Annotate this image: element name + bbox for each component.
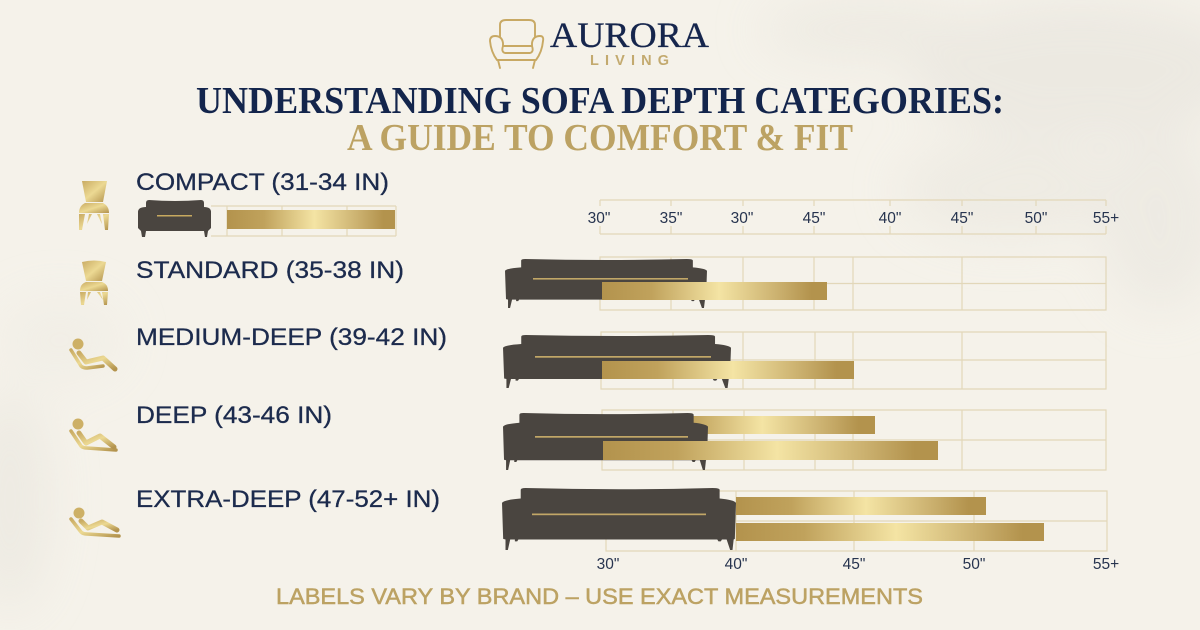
bottom axis: 45" bbox=[843, 556, 865, 573]
top axis: 55+ bbox=[1093, 210, 1119, 227]
top axis: 35" bbox=[660, 210, 682, 227]
label: MEDIUM-DEEP (39-42 IN) bbox=[136, 324, 447, 351]
bottom axis: 55+ bbox=[1093, 556, 1119, 573]
icon: armchair bbox=[490, 20, 543, 68]
row: standard bbox=[80, 257, 1106, 310]
icon: recliner bbox=[71, 508, 119, 536]
icon: sofa bbox=[503, 335, 731, 388]
top axis bbox=[588, 200, 1119, 234]
top axis: 45" bbox=[951, 210, 973, 227]
wordmark: AURORA bbox=[550, 15, 709, 55]
icon: sofa bbox=[502, 488, 736, 550]
footer note: LABELS VARY BY BRAND – USE EXACT MEASUREMENTS bbox=[276, 584, 923, 609]
label: EXTRA-DEEP (47-52+ IN) bbox=[136, 486, 440, 513]
icon: recliner bbox=[71, 418, 116, 450]
bottom axis: 30" bbox=[597, 556, 619, 573]
depth grid bbox=[601, 332, 1106, 389]
row: compact bbox=[79, 169, 396, 237]
title: UNDERSTANDING SOFA DEPTH CATEGORIES: bbox=[196, 80, 1004, 122]
lower bar bbox=[736, 523, 1044, 541]
upper bar bbox=[640, 416, 875, 434]
subtitle: A GUIDE TO COMFORT & FIT bbox=[347, 117, 853, 159]
bottom axis bbox=[597, 556, 1119, 573]
icon: sofa bbox=[138, 200, 211, 237]
label: STANDARD (35-38 IN) bbox=[136, 257, 404, 284]
top axis: 30" bbox=[588, 210, 610, 227]
bottom axis: 50" bbox=[963, 556, 985, 573]
top axis: 45" bbox=[803, 210, 825, 227]
depth grid bbox=[211, 206, 396, 236]
row: deep bbox=[71, 402, 1106, 470]
row: extra-deep bbox=[71, 486, 1107, 551]
icon: chair bbox=[80, 260, 108, 305]
sub wordmark: LIVING bbox=[590, 53, 669, 69]
icon: sofa bbox=[503, 413, 708, 470]
row: medium-deep bbox=[71, 324, 1106, 389]
depth grid bbox=[606, 491, 1107, 551]
lower bar bbox=[603, 441, 938, 460]
label: COMPACT (31-34 IN) bbox=[136, 169, 389, 196]
depth grid bbox=[602, 410, 1106, 470]
top axis: 30" bbox=[731, 210, 753, 227]
top axis: 50" bbox=[1025, 210, 1047, 227]
upper bar bbox=[736, 497, 986, 515]
icon: recliner bbox=[71, 338, 115, 369]
bottom axis: 40" bbox=[725, 556, 747, 573]
depth grid bbox=[600, 257, 1106, 310]
bar bbox=[602, 282, 827, 300]
label: DEEP (43-46 IN) bbox=[136, 402, 332, 429]
logo: Aurora Living bbox=[490, 15, 709, 69]
icon: chair bbox=[79, 181, 109, 230]
bar bbox=[227, 210, 395, 229]
top axis: 40" bbox=[879, 210, 901, 227]
bar bbox=[602, 361, 854, 379]
icon: sofa bbox=[505, 259, 707, 308]
